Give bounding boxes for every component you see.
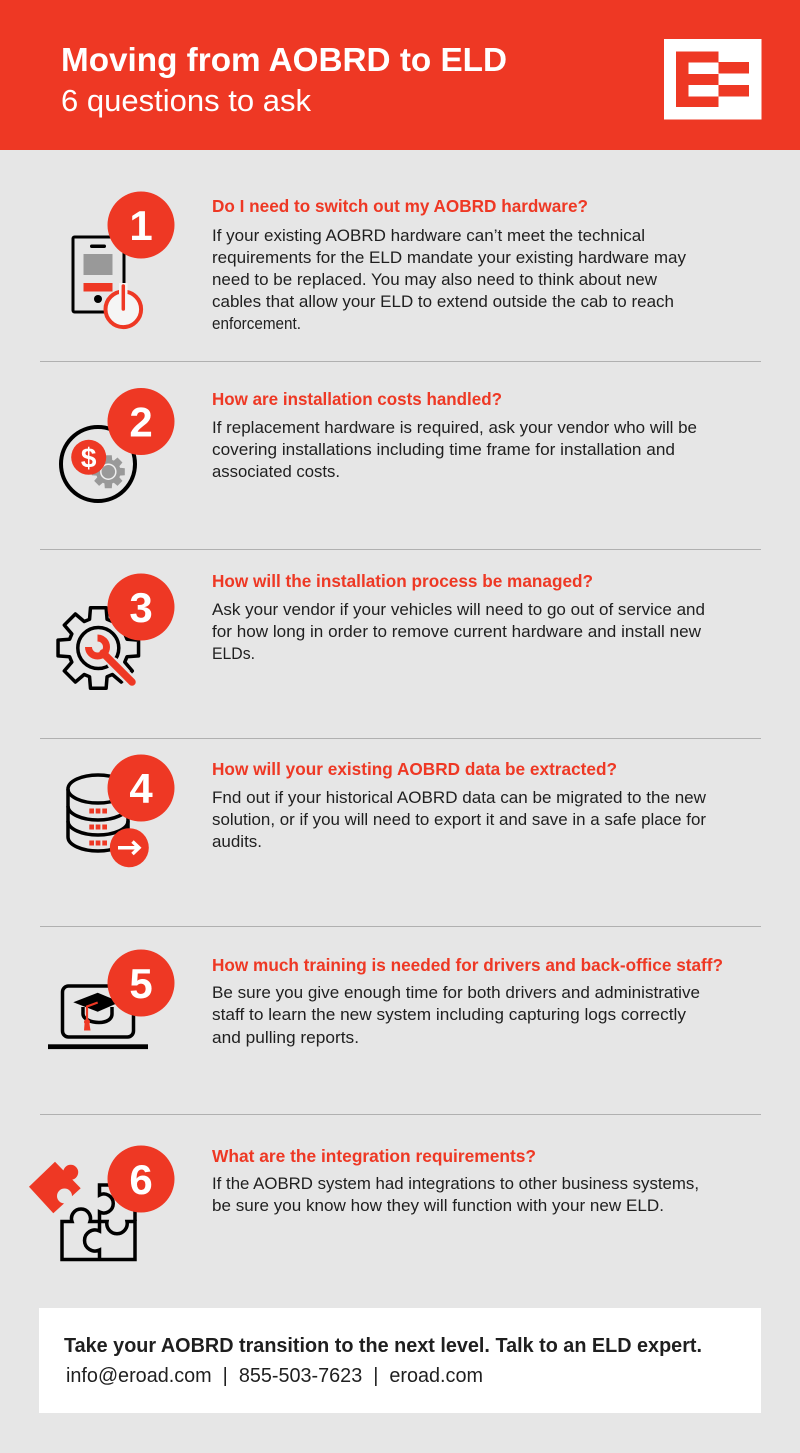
section 3: installation process bbox=[58, 571, 705, 688]
text block 1: cables that allow your ELD to extend outside the cab to reach bbox=[212, 293, 674, 311]
number badge 4: 4 bbox=[129, 765, 153, 812]
text block 2: associated costs. bbox=[212, 463, 340, 481]
heading 3: How will the installation process be managed? bbox=[212, 571, 593, 591]
text block 4 bbox=[212, 789, 707, 851]
icon: dollar and gear: $ bbox=[81, 442, 97, 474]
footer call to action bbox=[39, 1308, 761, 1413]
text block 3 bbox=[212, 601, 705, 663]
text block 4: Fnd out if your historical AOBRD data can be migrated to the new bbox=[212, 789, 706, 807]
number badge 5: 5 bbox=[129, 960, 153, 1007]
heading 6: What are the integration requirements? bbox=[212, 1146, 536, 1166]
section 6: integration bbox=[29, 1146, 699, 1260]
text block 3: ELDs. bbox=[212, 645, 255, 663]
number badge 6: 6 bbox=[129, 1156, 153, 1203]
number badge 1 bbox=[108, 192, 174, 258]
number badge 2: 2 bbox=[129, 398, 153, 446]
text block 6: If the AOBRD system had integrations to other business systems, bbox=[212, 1175, 699, 1193]
icon: laptop with graduation cap bbox=[48, 986, 148, 1049]
text block 3: Ask your vendor if your vehicles will need to go out of service and bbox=[212, 601, 705, 619]
text block 5: Be sure you give enough time for both drivers and administrative bbox=[212, 984, 700, 1002]
icon: database with arrow bbox=[68, 775, 149, 867]
section 5: training bbox=[48, 950, 723, 1049]
number badge 3 bbox=[108, 574, 174, 640]
number badge 6 bbox=[108, 1146, 174, 1212]
text block 6 bbox=[212, 1175, 699, 1215]
icon: puzzle pieces bbox=[29, 1162, 135, 1260]
heading 5: How much training is needed for drivers and back-office staff? bbox=[212, 955, 723, 975]
icon: dollar and gear bbox=[61, 427, 135, 501]
heading 1: Do I need to switch out my AOBRD hardware? bbox=[212, 196, 588, 216]
text block 1: need to be replaced. You may also need to think about new bbox=[212, 271, 657, 289]
text block 5: staff to learn the new system including capturing logs correctly bbox=[212, 1006, 687, 1024]
text block 1: enforcement. bbox=[212, 315, 301, 333]
text block 1: requirements for the ELD mandate your existing hardware may bbox=[212, 249, 687, 267]
number badge 4 bbox=[108, 754, 174, 822]
title: Moving from AOBRD to ELD bbox=[61, 41, 507, 78]
text block 1 bbox=[212, 227, 687, 333]
text block 5 bbox=[212, 984, 700, 1047]
subtitle: 6 questions to ask bbox=[61, 83, 312, 118]
call to action heading: Take your AOBRD transition to the next level. Talk to an ELD expert. bbox=[64, 1335, 702, 1357]
heading 2: How are installation costs handled? bbox=[212, 389, 502, 409]
text block 1: If your existing AOBRD hardware can’t meet the technical bbox=[212, 227, 645, 245]
logo bbox=[664, 39, 762, 120]
contact details: info@eroad.com | 855-503-7623 | eroad.com bbox=[66, 1365, 483, 1387]
number badge 3: 3 bbox=[129, 584, 153, 631]
text block 4: audits. bbox=[212, 833, 262, 851]
text block 2 bbox=[212, 419, 697, 481]
text block 6: be sure you know how they will function with your new ELD. bbox=[212, 1197, 664, 1215]
text block 3: for how long in order to remove current hardware and install new bbox=[212, 623, 701, 641]
heading 4: How will your existing AOBRD data be extracted? bbox=[212, 759, 617, 779]
text block 5: and pulling reports. bbox=[212, 1029, 359, 1047]
text block 2: covering installations including time frame for installation and bbox=[212, 441, 675, 459]
text block 4: solution, or if you will need to export it and save in a safe place for bbox=[212, 811, 707, 829]
number badge 5 bbox=[108, 950, 174, 1016]
number badge 1: 1 bbox=[129, 202, 153, 249]
number badge 2 bbox=[108, 388, 174, 455]
section 4: data extraction bbox=[68, 754, 707, 867]
text block 2: If replacement hardware is required, ask your vendor who will be bbox=[212, 419, 697, 437]
section 1: hardware bbox=[73, 192, 687, 333]
header banner bbox=[0, 0, 800, 150]
icon: gear and wrench bbox=[58, 608, 139, 688]
section 2: installation costs bbox=[61, 388, 697, 501]
icon: phone with power button bbox=[73, 237, 141, 327]
